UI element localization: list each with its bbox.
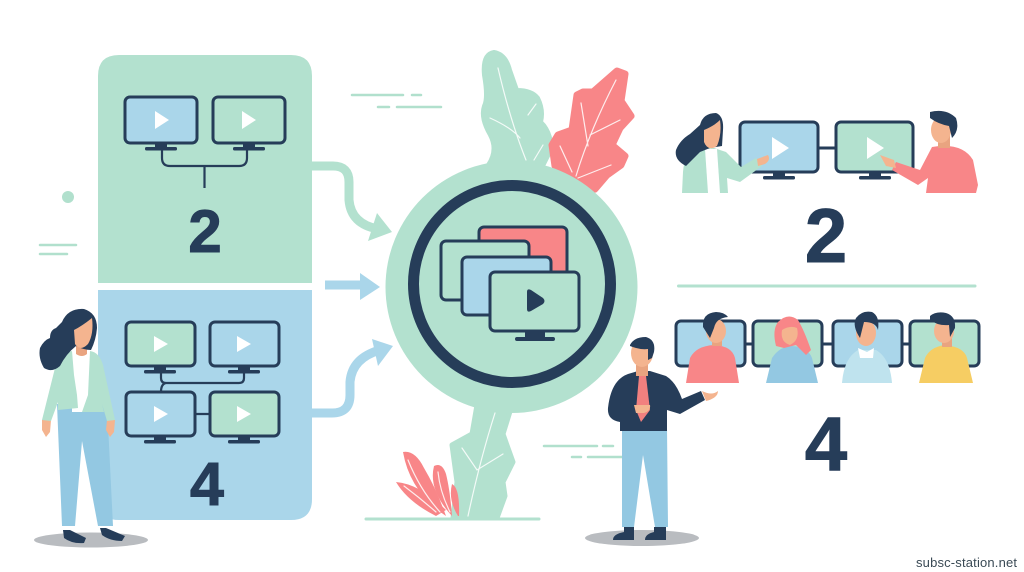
monitor: green [836, 122, 913, 180]
person: light blue shirt [842, 312, 892, 383]
decorative accents [40, 95, 625, 457]
icon: stacked monitors [441, 227, 579, 341]
figure: man presenting [585, 337, 718, 546]
person: man [880, 111, 978, 193]
number 2: 2 [188, 198, 222, 265]
leaf: green top [483, 52, 552, 172]
number 4 right: 4 [805, 402, 847, 487]
leaf: red top [552, 71, 631, 189]
watermark: subsc-station.net [916, 555, 1017, 570]
central circle [386, 161, 638, 413]
icon: four connected monitors [126, 322, 279, 444]
number 4: 4 [190, 450, 224, 518]
panel: two people with screens [676, 111, 978, 193]
arrow: blue from four-screen panel [312, 339, 393, 413]
leaf: green bottom [452, 405, 513, 518]
ground line [366, 518, 539, 520]
monitor row [676, 321, 979, 374]
person: yellow shirt [919, 312, 973, 383]
monitor: blue [740, 122, 818, 180]
arrow: blue middle [325, 273, 380, 300]
leaf: red bottom [396, 452, 459, 516]
panel: four people with screens [676, 312, 979, 383]
person: red shirt [686, 312, 739, 383]
panel: two screens [98, 55, 312, 283]
person: pink hair [766, 316, 818, 383]
panel: four screens [98, 290, 312, 520]
number 2 right: 2 [805, 194, 847, 279]
figure: woman standing [34, 309, 148, 548]
arrow: green from two-screen panel [312, 166, 392, 241]
icon: two connected monitors [125, 97, 285, 188]
person: woman [676, 113, 769, 193]
